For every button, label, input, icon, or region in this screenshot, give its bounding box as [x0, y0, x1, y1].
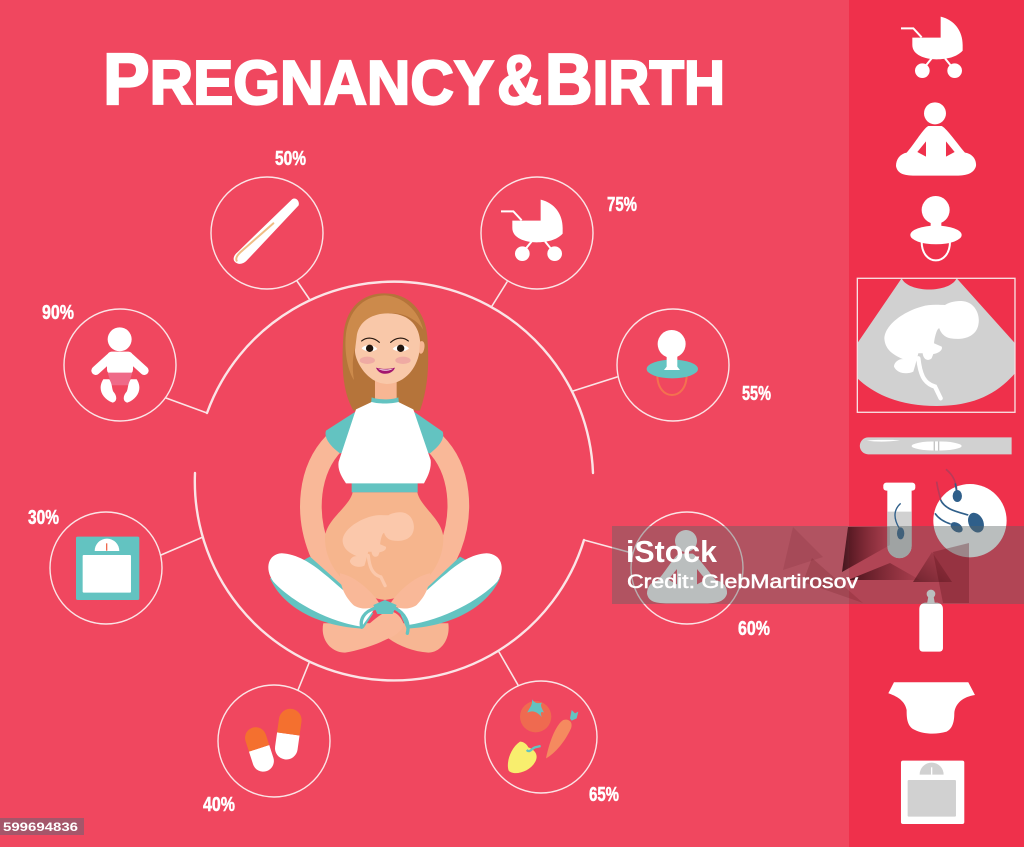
face	[355, 313, 420, 384]
circle: pacifier 55%	[617, 309, 729, 421]
label 40%: 40%	[203, 794, 235, 816]
label 50%: 50%	[275, 148, 306, 170]
icon: sperm and egg	[933, 469, 1007, 557]
sleeves and hem	[326, 397, 443, 492]
legs	[270, 557, 500, 629]
label 90%: 90%	[42, 302, 74, 324]
icon: side meditating figure	[896, 102, 976, 176]
icon: stroller	[501, 200, 563, 261]
watermark band	[612, 526, 1024, 604]
circle: meditation 60%	[631, 512, 743, 624]
icon: ultrasound scan	[857, 278, 1015, 412]
eyes	[362, 338, 409, 352]
icon: pacifier	[647, 330, 698, 395]
label 60%: 60%	[738, 618, 770, 640]
image id label: 599694836	[3, 820, 78, 834]
circle: scale 30%	[50, 512, 162, 624]
icon: side pacifier	[910, 196, 962, 260]
crossed ankle	[360, 611, 404, 640]
title: &	[497, 41, 542, 119]
icon: bathroom scale	[76, 537, 139, 600]
icon: side bathroom scale	[901, 761, 964, 824]
title: BIRTH	[545, 40, 725, 120]
image id label	[0, 818, 84, 835]
icon: pregnancy test stick	[860, 437, 1012, 454]
label 75%: 75%	[607, 194, 637, 216]
icon: side stroller	[901, 17, 963, 78]
icon: thermometer	[234, 198, 299, 264]
title	[103, 40, 725, 120]
circle: stroller 75%	[481, 177, 593, 289]
icon: vegetables	[508, 699, 578, 773]
neck	[375, 377, 397, 403]
icon: pills	[242, 707, 303, 774]
circle: pills 40%	[218, 685, 330, 797]
icon: meditating figure	[647, 530, 727, 603]
panel: right icon column	[849, 0, 1024, 847]
fetus in belly	[343, 512, 414, 586]
knot and strap	[373, 600, 397, 614]
shirt	[338, 402, 431, 483]
central ring with connectors	[161, 281, 632, 690]
circle: thermometer 50%	[211, 177, 323, 289]
icon: diaper	[888, 682, 975, 734]
title: PREGNANCY	[103, 40, 494, 120]
belly	[325, 492, 443, 600]
label 55%: 55%	[742, 383, 771, 405]
watermark brand text	[626, 534, 858, 593]
watermark brand text: Credit: GlebMartirosov	[627, 571, 858, 593]
arms	[311, 443, 458, 600]
icon: test tube	[883, 483, 915, 558]
hands	[340, 573, 430, 609]
circle: baby 90%	[64, 309, 176, 421]
feet	[385, 623, 449, 653]
watermark brand text: iStock	[626, 534, 718, 569]
circle: vegetables 65%	[485, 681, 597, 793]
hair	[343, 293, 428, 411]
icon: baby bottle	[919, 590, 943, 652]
pregnant woman figure	[268, 293, 502, 653]
label 65%: 65%	[589, 784, 619, 806]
label 30%: 30%	[28, 507, 59, 529]
cheeks	[360, 357, 411, 364]
mouth	[376, 368, 395, 374]
icon: baby	[96, 327, 144, 403]
